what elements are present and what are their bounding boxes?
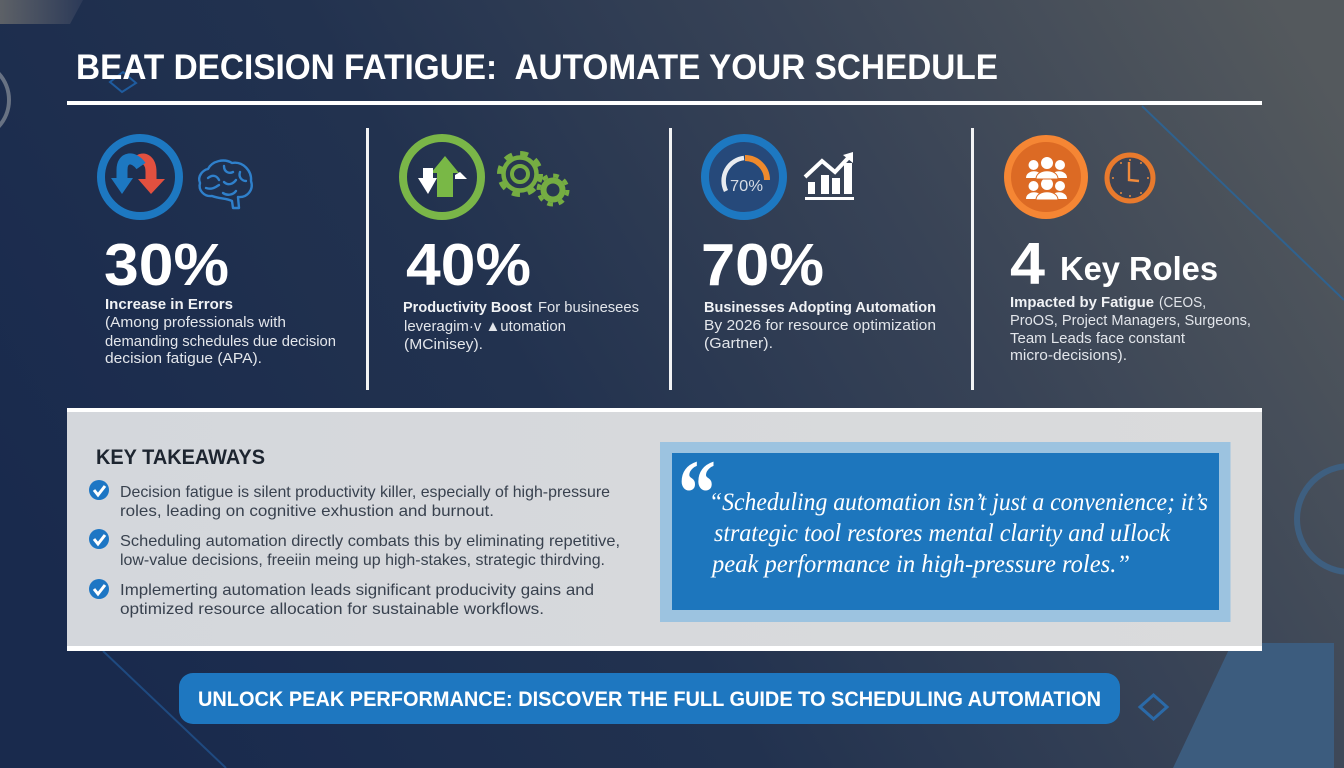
takeaway 3: Implemerting automation leads significant producivity gains and [120, 582, 594, 599]
divider [971, 128, 974, 390]
decor: right diagonal line [1142, 106, 1344, 300]
panel: takeaways and quote [67, 408, 1262, 651]
takeaway 1: roles, leading on cognitive exhustion and burnout. [120, 503, 494, 520]
icon: growth chart [805, 152, 854, 200]
icon: clock [1107, 155, 1153, 201]
icon: 70% gauge in blue ring [705, 138, 783, 216]
icon: gears [500, 154, 568, 204]
panel: 4 key roles [1004, 135, 1251, 364]
decor: left ring [0, 61, 9, 139]
quote text [709, 489, 1208, 578]
stat description: leveragim·v ▲utomation [404, 318, 566, 335]
stat description: Team Leads face constant [1010, 330, 1186, 347]
decor: bottom-right shape [1173, 643, 1334, 768]
divider [669, 128, 672, 390]
quote text: “Scheduling automation isn’t just a convenience; it’s [709, 489, 1208, 516]
stat: 70%: 70% [701, 232, 824, 298]
stat description: Impacted by Fatigue [1010, 294, 1154, 311]
stat description: ProOS, Project Managers, Surgeons, [1010, 312, 1251, 329]
decor: lower-left diagonal line [103, 651, 226, 768]
panel: 30% increase in errors [101, 138, 336, 367]
icon: brain [199, 161, 252, 208]
icon: quotation mark: “ [678, 440, 716, 546]
stat: 40%: 40% [406, 232, 531, 298]
quote box [660, 440, 1230, 622]
icon: crossing arrows in blue ring [101, 138, 179, 216]
takeaway 3: optimized resource allocation for sustainable workflows. [120, 601, 544, 618]
icon: people in orange circle [1004, 135, 1088, 219]
stat description: (Gartner). [704, 335, 773, 352]
takeaway 2: low-value decisions, freeiin meing up high-stakes, strategic thirdving. [120, 552, 605, 569]
stat description: Productivity Boost [403, 299, 532, 316]
stat description [403, 299, 639, 353]
title rule [67, 101, 1262, 105]
decor: top-left shape [0, 0, 83, 24]
stat description [704, 299, 936, 352]
quote text: strategic tool restores mental clarity and uIlock [714, 520, 1171, 547]
panel: 70% businesses adopting automation [701, 138, 936, 352]
panel background [67, 408, 1262, 651]
title: BEAT DECISION FATIGUE: AUTOMATE YOUR SCHEDULE [76, 48, 998, 87]
stat description [1010, 294, 1251, 364]
stat description: micro-decisions). [1010, 347, 1127, 364]
stat description: By 2026 for resource optimization [704, 317, 936, 334]
stat description: Businesses Adopting Automation [704, 299, 936, 316]
decor: right ring [1297, 466, 1344, 572]
stat: 4 key roles: Key Roles [1060, 250, 1218, 287]
stat description: Increase in Errors [105, 296, 233, 313]
decor: bottom diamond [1140, 695, 1167, 719]
stat description: decision fatigue (APA). [105, 350, 262, 367]
panel: 40% productivity boost [403, 138, 639, 353]
takeaway 1 [89, 480, 610, 520]
stat description: (Among professionals with [105, 314, 286, 331]
stat: 4 key roles: 4 [1010, 231, 1045, 297]
takeaway 2 [89, 529, 620, 569]
stat description: demanding schedules due decision [105, 333, 336, 350]
stat: 30%: 30% [104, 232, 229, 298]
takeaway 3 [89, 579, 594, 618]
icon: 70% gauge in blue ring: 70% [730, 178, 763, 195]
quote text: peak performance in high-pressure roles.” [710, 551, 1130, 578]
takeaway 2: Scheduling automation directly combats this by eliminating repetitive, [120, 533, 620, 550]
heading: key takeaways: KEY TAKEAWAYS [96, 446, 265, 469]
stat description: (MCinisey). [404, 336, 483, 353]
takeaway 1: Decision fatigue is silent productivity killer, especially of high-pressure [120, 484, 610, 501]
stat: 4 key roles [1010, 231, 1218, 297]
call to action button: UNLOCK PEAK PERFORMANCE: DISCOVER THE FULL GUIDE TO SCHEDULING AUTOMATION [198, 688, 1101, 711]
icon: up and down arrows in green ring [403, 138, 481, 216]
decor: top diamond [110, 72, 136, 92]
call to action button [179, 673, 1120, 724]
divider [366, 128, 369, 390]
stat description [105, 296, 336, 367]
stat description: For businesees [538, 299, 639, 316]
stat description: (CEOS, [1159, 294, 1206, 311]
